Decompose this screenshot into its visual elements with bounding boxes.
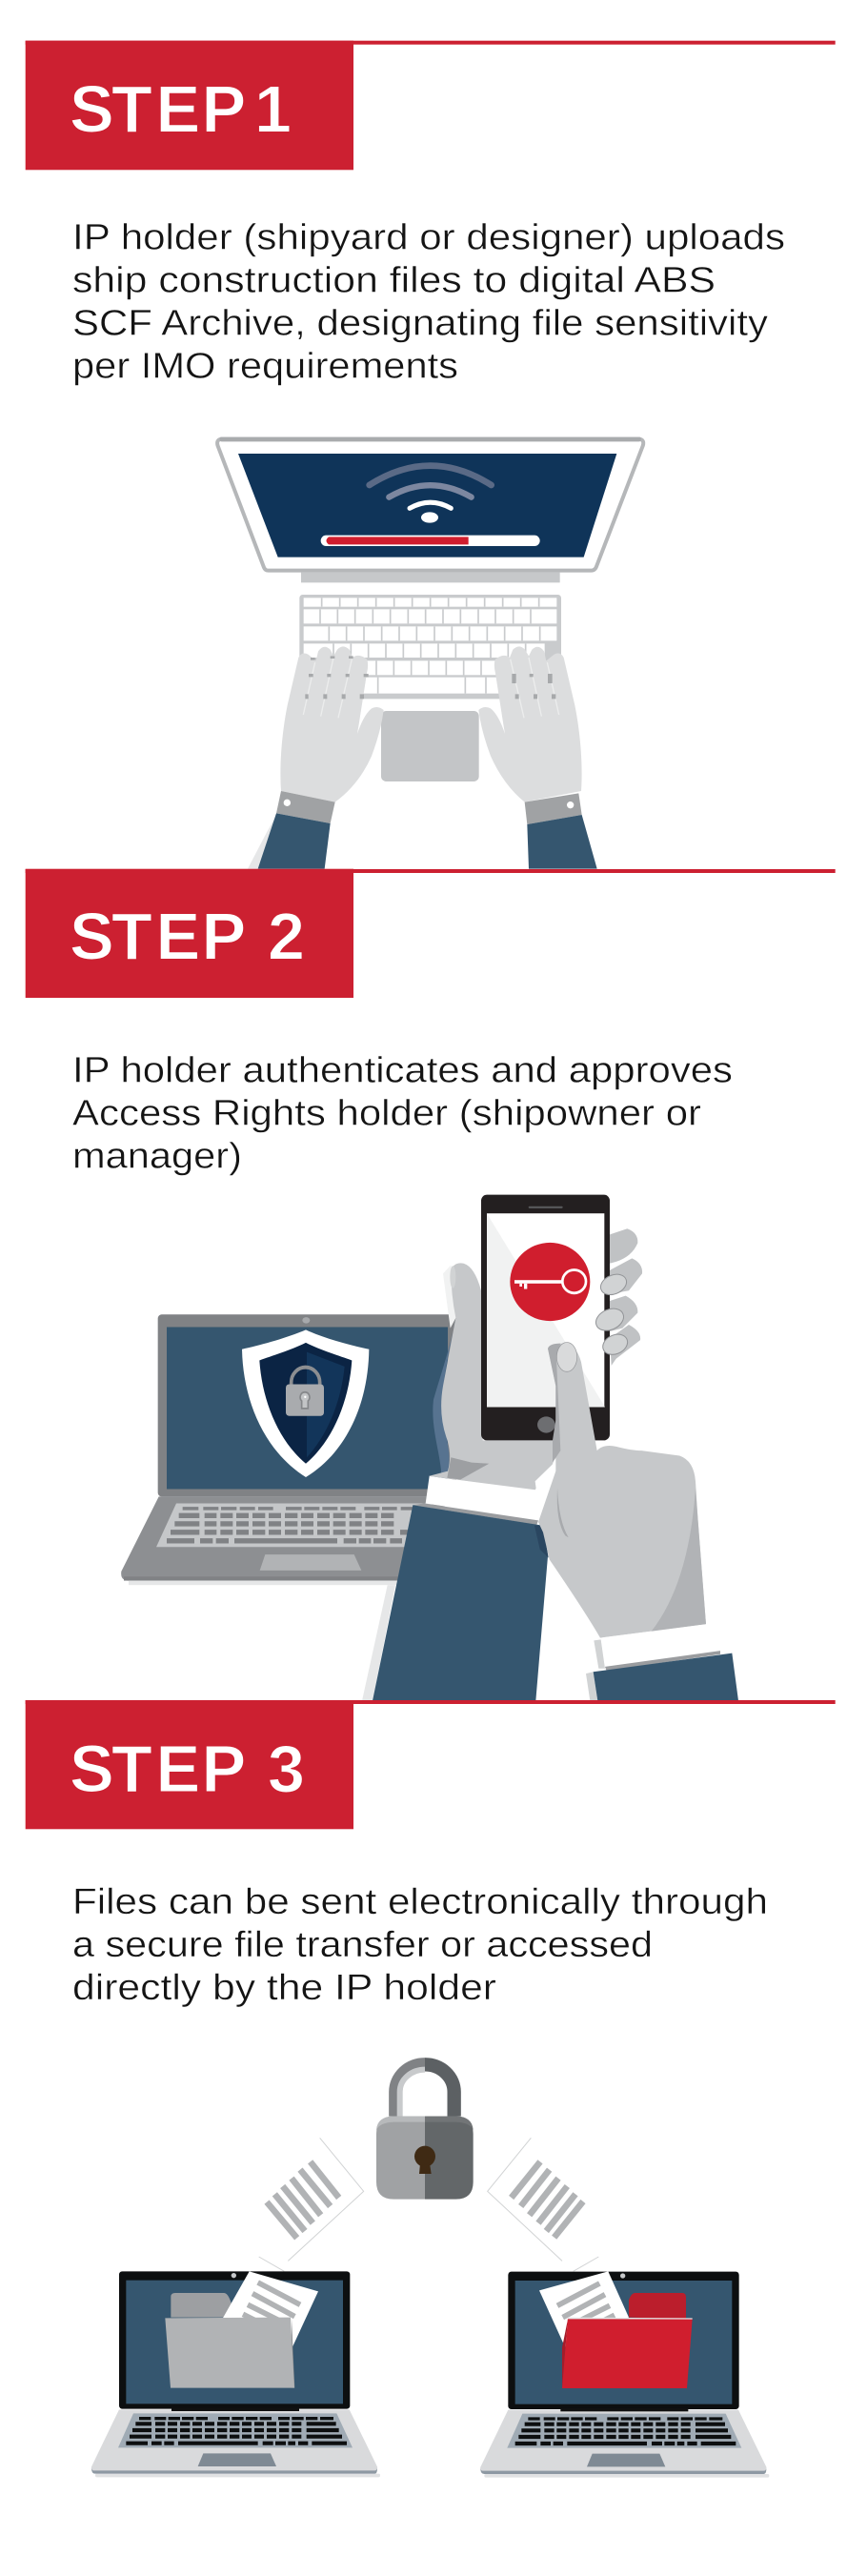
flying document right (488, 2138, 598, 2271)
step 1 header bar (26, 41, 836, 170)
illustration: laptop with security shield (121, 1314, 456, 1585)
text: step 2 description: Access Rights holder (shipowner or (72, 1094, 701, 1134)
step 3 header bar (26, 1700, 836, 1829)
laptop screen lid (217, 437, 643, 571)
heading: step 2: STEP 2 (70, 900, 305, 974)
illustration: left laptop with gray folder (91, 2138, 380, 2477)
panel: step 2 (26, 869, 836, 1701)
illustration: hands typing on laptop uploading over wifi (217, 437, 643, 869)
fingertips gripping phone (593, 1270, 630, 1358)
flying document left (259, 2138, 364, 2271)
text: step 1 description: IP holder (shipyard or designer) uploads (72, 218, 785, 258)
illustration: hands using smartphone with key icon (362, 1195, 738, 1701)
left cuff and sleeve (362, 1476, 548, 1701)
heading: step 1: STEP 1 (70, 72, 292, 147)
panel: step 3 (26, 1700, 836, 2478)
trackpad (260, 1554, 361, 1571)
text: step 2 description: manager) (72, 1137, 242, 1177)
laptop (480, 2272, 769, 2478)
text: step 1 description (72, 218, 785, 387)
illustration: right laptop with red folder (480, 2138, 769, 2478)
smartphone (481, 1195, 610, 1440)
pointing hand (534, 1343, 706, 1638)
text: step 3 description: Files can be sent electronically through (72, 1882, 768, 1922)
right hand and sleeve (478, 646, 597, 869)
right cuff and sleeve (586, 1624, 738, 1701)
text: step 1 description: ship construction files to digital ABS (72, 261, 716, 301)
laptop (91, 2271, 380, 2477)
laptop body (121, 1314, 456, 1585)
step 2 header bar (26, 869, 836, 998)
upload progress bar (321, 536, 540, 546)
holding hand fingers (610, 1228, 642, 1366)
keyboard (299, 595, 561, 699)
icon: wifi signal (370, 466, 492, 523)
trackpad (381, 711, 479, 781)
panel: step 1 (26, 41, 836, 869)
icon: gray folder with document (165, 2271, 318, 2388)
text: step 1 description: SCF Archive, designating file sensitivity (72, 303, 768, 343)
text: step 2 description (72, 1051, 733, 1177)
text: step 3 description (72, 1882, 768, 2008)
icon: central padlock (376, 2064, 474, 2200)
text: step 1 description: per IMO requirements (72, 347, 458, 387)
text: step 3 description: a secure file transfer or accessed (72, 1925, 653, 1965)
left hand and sleeve (248, 646, 384, 869)
text: step 2 description: IP holder authenticates and approves (72, 1051, 733, 1091)
icon: security shield with padlock (242, 1329, 369, 1477)
text: step 3 description: directly by the IP holder (72, 1968, 496, 2008)
icon: red key circle (510, 1243, 590, 1321)
icon: red folder with document (539, 2271, 693, 2388)
holding hand palm and thumb (429, 1263, 559, 1490)
heading: step 3: STEP 3 (70, 1732, 305, 1806)
